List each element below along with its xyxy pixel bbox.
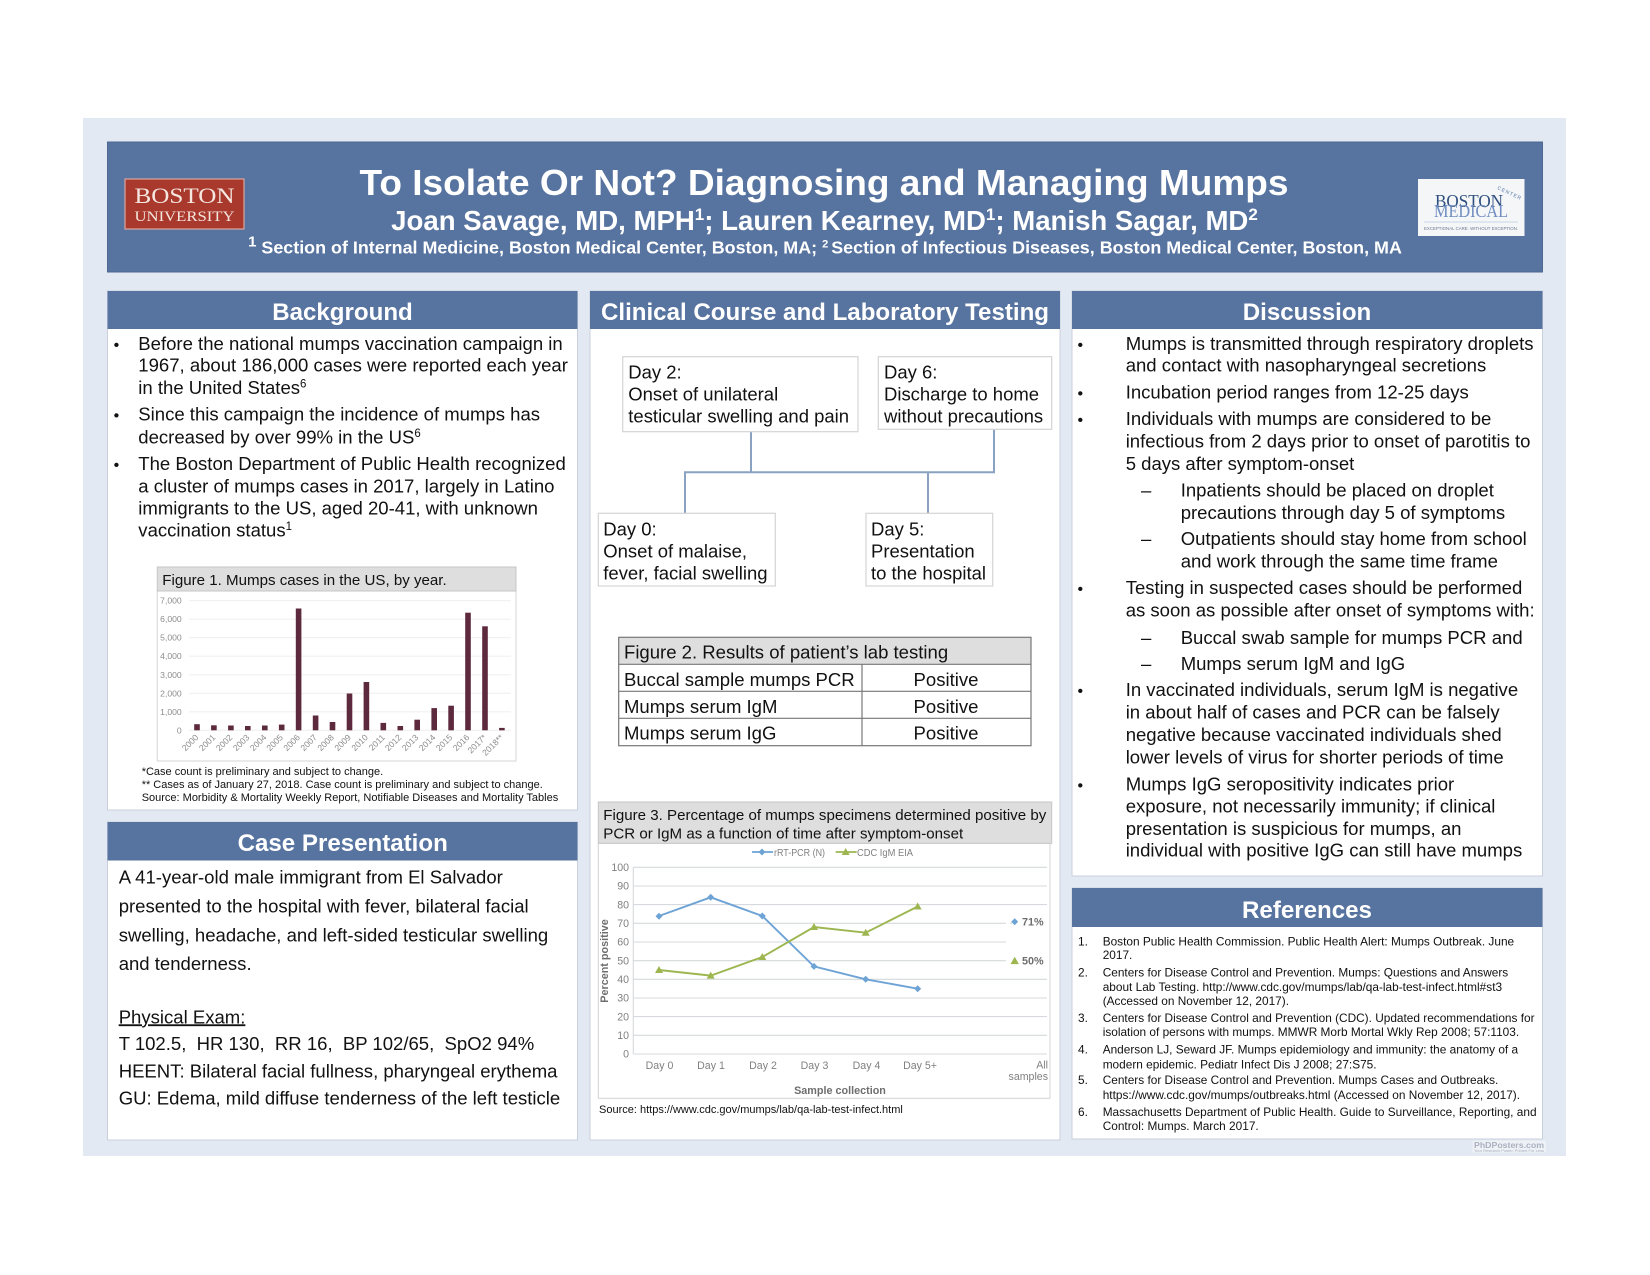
discussion bullets: 5 days after symptom-onset — [1126, 453, 1355, 474]
background bullets: Since this campaign the incidence of mumps has — [138, 404, 540, 425]
discussion bullets: • — [1078, 778, 1083, 795]
header banner — [108, 142, 1542, 272]
discussion bullets: – — [1141, 480, 1152, 501]
background bullets: immigrants to the US, aged 20-41, with unknown — [138, 497, 538, 518]
y axis labels: 0 — [623, 1049, 629, 1061]
logo: Boston Medical Center — [1418, 179, 1524, 236]
case narrative: presented to the hospital with fever, bilateral facial — [119, 895, 529, 916]
series: rRT-PCR — [656, 894, 921, 992]
figure 2: lab results table — [619, 637, 1031, 746]
discussion bullets: Buccal swab sample for mumps PCR and — [1181, 627, 1523, 648]
case narrative: swelling, headache, and left-sided testicular swelling — [119, 924, 548, 945]
discussion bullets: – — [1141, 627, 1152, 648]
reference list: isolation of persons with mumps. MMWR Morb Mortal Wkly Rep 2008; 57:1103. — [1103, 1025, 1519, 1039]
background bullets: Before the national mumps vaccination campaign in — [138, 333, 563, 354]
x axis labels — [646, 1060, 937, 1072]
figure 2: lab results table: Mumps serum IgM — [624, 696, 777, 717]
heading: References: References — [1242, 897, 1372, 924]
heading: Clinical Course: Clinical Course and Laboratory Testing — [601, 299, 1049, 326]
y axis labels: 10 — [617, 1030, 629, 1042]
y axis labels: 2,000 — [160, 688, 182, 698]
y axis labels: 60 — [617, 937, 629, 949]
y axis labels: 50 — [617, 955, 629, 967]
background bullets: • — [114, 457, 119, 474]
physical exam — [119, 1006, 560, 1108]
timeline box: Day 5 — [866, 513, 993, 586]
y axis labels: 6,000 — [160, 614, 182, 624]
timeline box: Day 2: Onset of unilateral — [628, 383, 778, 404]
x axis year labels: 2014 — [417, 732, 438, 753]
x axis year labels: 2018** — [480, 732, 506, 758]
timeline box: Day 2: Day 2: — [628, 361, 682, 382]
x axis year labels: 2013 — [400, 732, 421, 753]
discussion bullets: • — [1078, 337, 1083, 354]
reference list: Control: Mumps. March 2017. — [1103, 1119, 1259, 1133]
figure 1 footnotes — [142, 766, 559, 804]
discussion bullets: • — [1078, 412, 1083, 429]
logo: Boston University — [125, 179, 244, 229]
all samples: 71%: 71% — [1022, 916, 1044, 928]
timeline box: Day 6: without precautions — [883, 405, 1043, 426]
legend: CDC IgM EIA — [857, 848, 913, 859]
PhDPosters watermark: Your Research Poster. Printed For Less — [1474, 1149, 1544, 1153]
authors: ; Manish Sagar, MD — [995, 205, 1248, 236]
discussion bullets: Mumps is transmitted through respiratory droplets — [1126, 333, 1534, 354]
background bullets: vaccination status — [138, 520, 286, 541]
case narrative: A 41-year-old male immigrant from El Salvador — [119, 866, 503, 887]
logo: Boston University: UNIVERSITY — [134, 209, 235, 225]
logo: Boston Medical Center: CENTER — [1496, 185, 1523, 202]
discussion bullets: as soon as possible after onset of symptoms with: — [1126, 600, 1535, 621]
figure 2: lab results table: Positive — [914, 722, 978, 743]
heading: Case Presentation: Case Presentation — [238, 830, 448, 857]
background bullets: 1 — [286, 521, 292, 533]
PhDPosters watermark: PhDPosters.com — [1474, 1141, 1544, 1150]
logo: Boston Medical Center: MEDICAL — [1434, 201, 1508, 221]
x axis year labels: 2003 — [231, 732, 252, 753]
y axis labels: 30 — [617, 993, 629, 1005]
figure 3: line chart: samples — [1009, 1071, 1048, 1083]
reference list: Massachusetts Department of Public Health. Guide to Surveillance, Reporting, and — [1103, 1105, 1537, 1119]
discussion bullets: precautions through day 5 of symptoms — [1181, 502, 1505, 523]
title: To Isolate Or Not? Diagnosing and Managing Mumps — [360, 162, 1288, 203]
background bullets: 1967, about 186,000 cases were reported each year — [138, 355, 568, 376]
reference list: Anderson LJ, Seward JF. Mumps epidemiology and immunity: the anatomy of a — [1103, 1042, 1519, 1056]
physical exam: T 102.5, HR 130, RR 16, BP 102/65, SpO2 94% — [119, 1033, 534, 1054]
timeline box: Day 6: Day 6: — [884, 361, 937, 382]
discussion bullets: and contact with nasopharyngeal secretions — [1126, 355, 1486, 376]
logo: Boston Medical Center: EXCEPTIONAL CARE. WITHOUT EXCEPTION. — [1424, 226, 1518, 231]
reference list: https://www.cdc.gov/mumps/outbreaks.html (Accessed on November 12, 2017). — [1103, 1088, 1520, 1102]
case narrative: and tenderness. — [119, 953, 252, 974]
discussion bullets: exposure, not necessarily immunity; if clinical — [1126, 796, 1495, 817]
x axis year labels — [180, 732, 506, 758]
x axis year labels: 2015 — [434, 732, 455, 753]
figure 2: lab results table: Figure 2. Results of patient’s lab testing — [624, 641, 948, 662]
panel: Background — [108, 291, 578, 810]
x axis labels: Day 5+ — [903, 1060, 937, 1072]
reference list — [1078, 935, 1537, 1133]
discussion bullets: infectious from 2 days prior to onset of parotitis to — [1126, 431, 1530, 452]
reference list: 3. — [1078, 1011, 1088, 1025]
y axis labels: 40 — [617, 974, 629, 986]
x axis labels: Day 0 — [646, 1060, 673, 1072]
figure 3: line chart: Percent positive — [599, 919, 611, 1003]
figure 3: line chart: All — [1036, 1060, 1048, 1072]
affiliations: 2 — [822, 238, 831, 250]
y axis labels: 70 — [617, 918, 629, 930]
reference list: Centers for Disease Control and Prevention. Mumps: Questions and Answers — [1103, 966, 1508, 980]
reference list: 2. — [1078, 966, 1088, 980]
legend — [752, 848, 913, 859]
y axis labels: 4,000 — [160, 651, 182, 661]
x axis labels: Day 3 — [801, 1060, 828, 1072]
y axis labels: 20 — [617, 1011, 629, 1023]
affiliations: Section of Internal Medicine, Boston Medical Center, Boston, MA; — [256, 237, 822, 257]
x axis year labels: 2017* — [465, 732, 489, 755]
physical exam: GU: Edema, mild diffuse tenderness of the left testicle — [119, 1087, 560, 1108]
poster background — [83, 118, 1566, 1156]
x axis year labels: 2007 — [298, 732, 319, 753]
x axis year labels: 2008 — [315, 732, 336, 753]
all samples: 50%: 50% — [1022, 956, 1044, 968]
discussion bullets: Mumps serum IgM and IgG — [1181, 653, 1405, 674]
y axis labels: 7,000 — [160, 596, 182, 606]
authors: ; Lauren Kearney, MD — [704, 205, 986, 236]
heading: Background: Background — [272, 299, 413, 326]
timeline box: Day 6: Discharge to home — [884, 383, 1039, 404]
x axis year labels: 2000 — [180, 732, 201, 753]
figure 3 title: Figure 3. Percentage of mumps specimens determined positive by — [603, 807, 1047, 824]
series: CDC IgM EIA — [655, 902, 922, 979]
x axis year labels: 2006 — [281, 732, 302, 753]
panel: Discussion — [1072, 291, 1542, 876]
figure 3: line chart: PCR or IgM as a function of time after symptom-onset — [603, 825, 964, 842]
gridlines — [633, 866, 1047, 868]
physical exam: Physical Exam: — [119, 1006, 245, 1027]
y axis labels: 3,000 — [160, 670, 182, 680]
timeline box: Day 0: Onset of malaise, — [603, 541, 747, 562]
timeline box: Day 6 — [878, 357, 1052, 429]
discussion bullets: • — [1078, 385, 1083, 402]
case narrative — [119, 866, 548, 974]
discussion bullets: Outpatients should stay home from school — [1181, 528, 1527, 549]
axis titles: Sample collection — [794, 1085, 886, 1097]
all samples: 71% — [1011, 916, 1044, 928]
x axis labels: Day 4 — [853, 1060, 880, 1072]
discussion bullets: Incubation period ranges from 12-25 days — [1126, 381, 1469, 402]
discussion bullets: presentation is suspicious for mumps, an — [1126, 818, 1461, 839]
panel: References — [1072, 888, 1542, 1139]
authors: 1 — [695, 205, 704, 224]
discussion bullets: Mumps IgG seropositivity indicates prior — [1126, 774, 1454, 795]
reference list: Boston Public Health Commission. Public Health Alert: Mumps Outbreak. June — [1103, 935, 1515, 949]
discussion bullets: and work through the same time frame — [1181, 550, 1498, 571]
y axis labels: 5,000 — [160, 633, 182, 643]
heading: Discussion: Discussion — [1243, 299, 1371, 326]
background bullets — [114, 333, 568, 541]
x axis year labels: 2016 — [451, 732, 472, 753]
background bullets: in the United States — [138, 377, 300, 398]
timeline box: Day 2 — [623, 357, 858, 432]
reference list: Centers for Disease Control and Prevention (CDC). Updated recommendations for — [1103, 1011, 1535, 1025]
figure 1: bar chart of mumps cases — [157, 567, 516, 761]
discussion bullets: In vaccinated individuals, serum IgM is negative — [1126, 679, 1518, 700]
y axis labels — [160, 596, 182, 735]
reference list: modern epidemic. Pediatr Infect Dis J 2008; 27:S75. — [1103, 1057, 1377, 1071]
x axis year labels: 2009 — [332, 732, 353, 753]
x axis year labels: 2004 — [248, 732, 269, 753]
discussion bullets: Testing in suspected cases should be performed — [1126, 577, 1522, 598]
figure 2: lab results table: Mumps serum IgG — [624, 722, 776, 743]
physical exam: HEENT: Bilateral facial fullness, pharyngeal erythema — [119, 1060, 558, 1081]
discussion bullets — [1078, 333, 1535, 861]
x axis year labels: 2012 — [383, 732, 404, 753]
panel: Clinical Course and Laboratory Testing — [590, 291, 1060, 1140]
affiliations: 1 — [248, 233, 256, 250]
timeline box: Day 5: to the hospital — [871, 563, 986, 584]
logo: Boston University: BOSTON — [134, 183, 235, 208]
y axis labels: 90 — [617, 881, 629, 893]
background bullets: • — [114, 337, 119, 354]
figure 3 source: Source: https://www.cdc.gov/mumps/lab/qa-lab-test-infect.html — [599, 1104, 903, 1116]
background bullets: a cluster of mumps cases in 2017, largely in Latino — [138, 475, 554, 496]
legend: rRT-PCR (N) — [774, 848, 825, 859]
figure 2: lab results table: Positive — [914, 696, 978, 717]
y axis labels: 1,000 — [160, 707, 182, 717]
panel: Case Presentation — [108, 822, 578, 1140]
x axis year labels: 2005 — [264, 732, 285, 753]
reference list: (Accessed on November 12, 2017). — [1103, 994, 1289, 1008]
timeline box: Day 2: testicular swelling and pain — [628, 405, 849, 426]
background bullets: 6 — [414, 428, 421, 440]
timeline box: Day 5: Day 5: — [871, 519, 924, 540]
figure 1 footnotes: Source: Morbidity & Mortality Weekly Report, Notifiable Diseases and Mortality Tables — [142, 792, 559, 804]
discussion bullets: Individuals with mumps are considered to be — [1126, 408, 1491, 429]
authors: 2 — [1248, 205, 1258, 224]
discussion bullets: lower levels of virus for shorter periods of time — [1126, 746, 1504, 767]
reference list: Centers for Disease Control and Prevention. Mumps Cases and Outbreaks. — [1103, 1073, 1498, 1087]
background bullets: decreased by over 99% in the US — [138, 426, 414, 447]
discussion bullets: individual with positive IgG can still have mumps — [1126, 840, 1522, 861]
figure 2: lab results table: Positive — [914, 669, 978, 690]
x axis year labels: 2010 — [349, 732, 370, 753]
reference list: 2017. — [1103, 948, 1132, 962]
y axis labels: 80 — [617, 899, 629, 911]
figure 1 title: Figure 1. Mumps cases in the US, by year. — [162, 572, 447, 589]
x axis labels: Day 1 — [697, 1060, 725, 1072]
bars — [194, 608, 505, 730]
discussion bullets: in about half of cases and PCR can be falsely — [1126, 702, 1500, 723]
reference list: 4. — [1078, 1042, 1088, 1056]
figure 2: lab results table: Buccal sample mumps PCR — [624, 669, 855, 690]
discussion bullets: – — [1141, 528, 1152, 549]
reference list: about Lab Testing. http://www.cdc.gov/mumps/lab/qa-lab-test-infect.html#st3 — [1103, 980, 1502, 994]
y axis labels: 100 — [611, 862, 629, 874]
authors: 1 — [986, 205, 995, 224]
timeline box: Day 5: Presentation — [871, 541, 975, 562]
reference list: 6. — [1078, 1105, 1088, 1119]
discussion bullets: Inpatients should be placed on droplet — [1181, 480, 1495, 501]
figure 1 footnotes: *Case count is preliminary and subject to change. — [142, 766, 383, 778]
x axis year labels: 2002 — [214, 732, 235, 753]
background bullets: The Boston Department of Public Health recognized — [138, 453, 566, 474]
figure 1 footnotes: ** Cases as of January 27, 2018. Case count is preliminary and subject to change. — [142, 779, 543, 791]
authors: Joan Savage, MD, MPH — [391, 205, 695, 236]
timeline box: Day 0: Day 0: — [603, 519, 657, 540]
affiliations: Section of Infectious Diseases, Boston Medical Center, Boston, MA — [831, 237, 1402, 257]
x axis year labels: 2011 — [367, 732, 387, 752]
y axis labels: 0 — [177, 725, 182, 735]
logo: Boston Medical Center: BOSTON — [1435, 191, 1503, 211]
discussion bullets: negative because vaccinated individuals shed — [1126, 724, 1502, 745]
x axis year labels: 2001 — [197, 732, 218, 753]
x axis labels: Day 2 — [749, 1060, 777, 1072]
discussion bullets: • — [1078, 683, 1083, 700]
discussion bullets: – — [1141, 653, 1152, 674]
PhDPosters watermark — [1472, 1140, 1546, 1153]
reference list: 5. — [1078, 1073, 1088, 1087]
figure 3: line chart — [598, 802, 1052, 1098]
timeline connectors — [685, 429, 994, 513]
reference list: 1. — [1078, 935, 1088, 949]
y axis labels — [611, 862, 629, 1061]
timeline box: Day 0 — [598, 513, 775, 586]
timeline box: Day 0: fever, facial swelling — [603, 563, 768, 584]
discussion bullets: • — [1078, 581, 1083, 598]
background bullets: 6 — [300, 378, 306, 390]
background bullets: • — [114, 408, 119, 425]
all samples: 50% — [1010, 956, 1044, 968]
